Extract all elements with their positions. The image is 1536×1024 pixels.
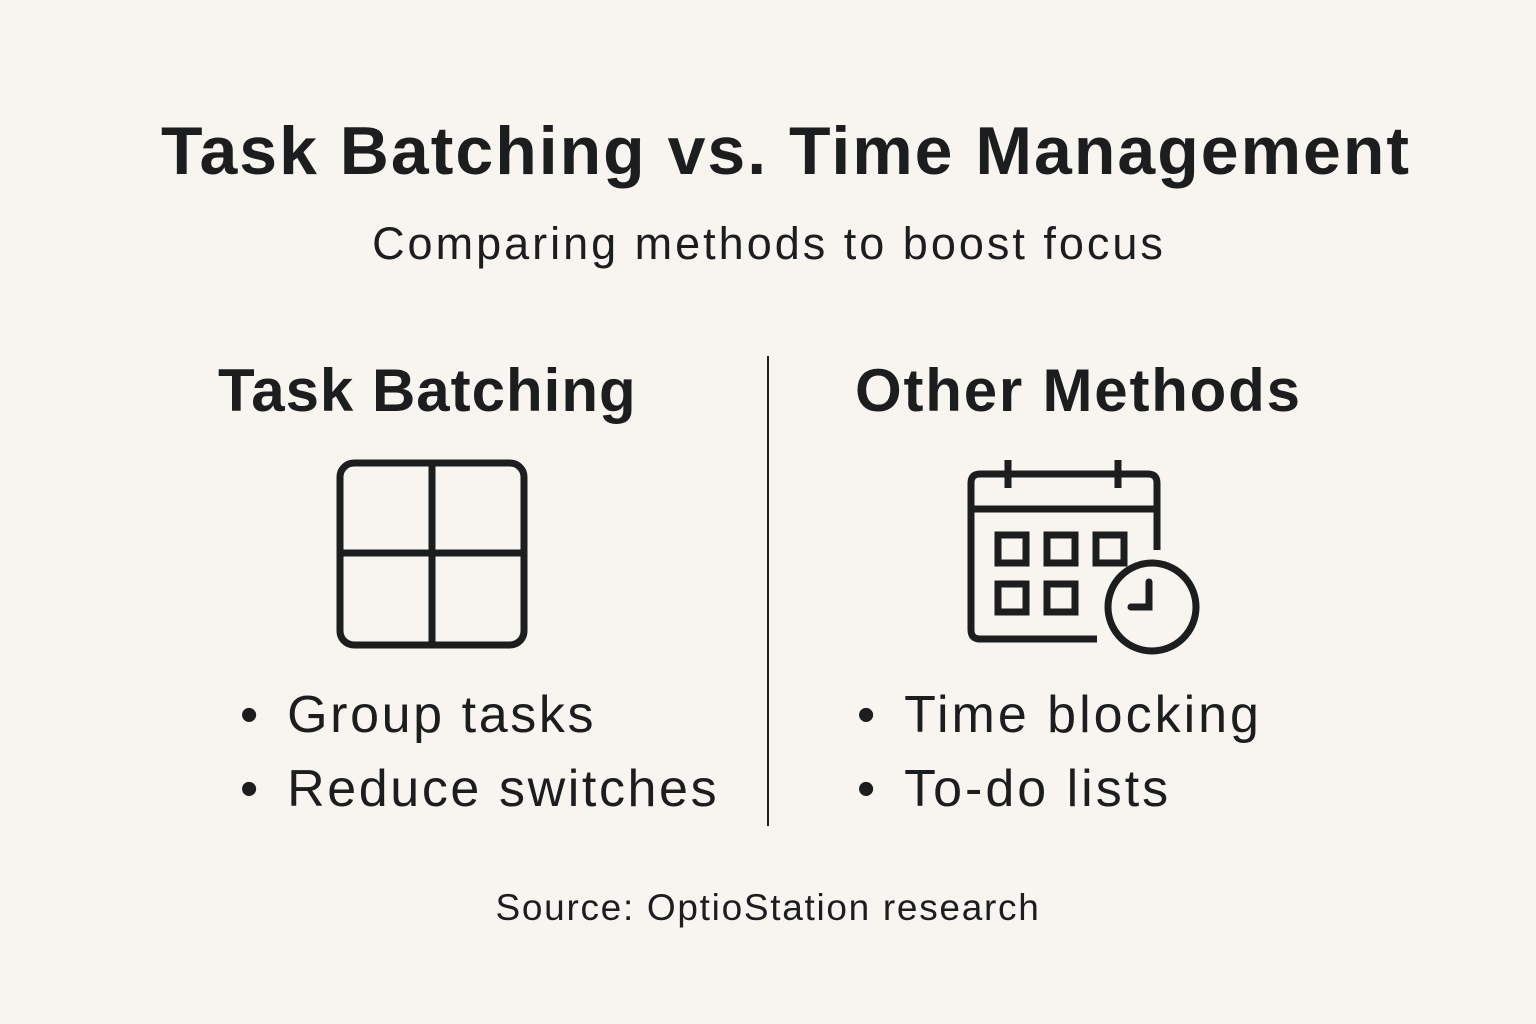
subtitle: Comparing methods to boost focus xyxy=(372,218,1166,269)
divider xyxy=(767,356,769,826)
icon: calendar with clock xyxy=(968,460,1200,654)
source: Source: OptioStation research xyxy=(496,887,1040,928)
heading: task batching: Task Batching xyxy=(218,357,637,424)
bullets: task batching: • Group tasks xyxy=(240,686,596,744)
bullets: other methods xyxy=(857,686,1262,818)
title: Task Batching vs. Time Management xyxy=(161,113,1411,189)
heading: other methods: Other Methods xyxy=(855,357,1302,424)
bullets: other methods: • To-do lists xyxy=(857,760,1171,818)
bullets: task batching: • Reduce switches xyxy=(240,760,719,818)
icon: grid xyxy=(336,460,528,648)
bullets: other methods: • Time blocking xyxy=(857,686,1262,744)
bullets: task batching xyxy=(240,686,719,818)
